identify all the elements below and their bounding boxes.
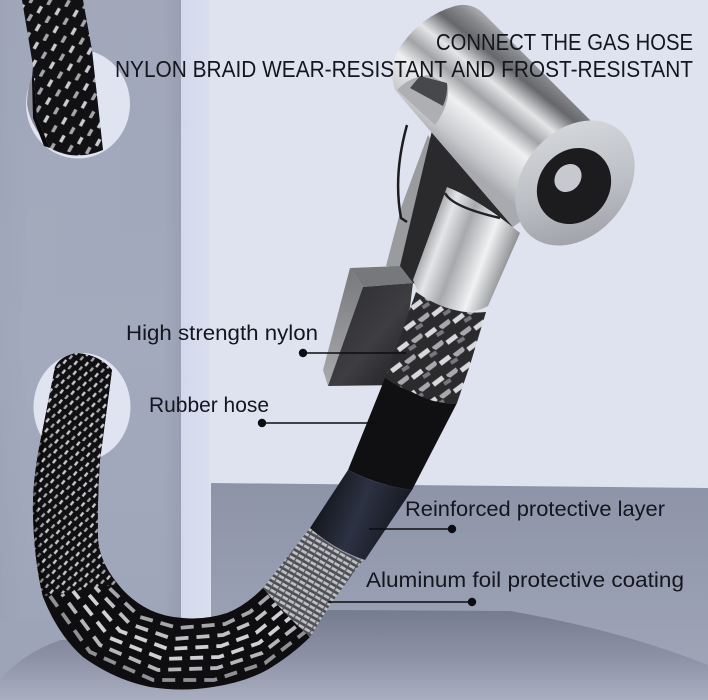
aluminum foil layer <box>263 528 363 637</box>
short braided section near collar <box>385 292 486 403</box>
reinforced protective layer <box>310 470 412 560</box>
callout: high strength nylon <box>126 322 406 357</box>
connector cylinder body <box>392 5 592 227</box>
lower hole in column <box>34 353 130 461</box>
metal clip lever <box>386 122 513 290</box>
nylon braided U-shaped hose <box>32 353 310 690</box>
callout: reinforced protective layer <box>369 498 665 533</box>
clip tab <box>323 266 413 386</box>
callout: rubber hose <box>149 394 379 427</box>
connector notch <box>397 75 448 125</box>
callout: rubber hose: Rubber hose <box>149 394 269 417</box>
top hose passing through hole <box>22 0 130 158</box>
connector inner recess <box>521 133 627 239</box>
connector end face <box>491 97 659 269</box>
title <box>115 29 693 82</box>
connector valve hole <box>549 158 587 198</box>
rubber hose <box>348 378 457 490</box>
callout: high strength nylon: High strength nylon <box>126 322 318 345</box>
metal connector head <box>392 5 659 269</box>
callout: aluminum foil protective coating <box>328 569 684 606</box>
callout: reinforced protective layer: Reinforced protective layer <box>405 498 665 521</box>
callout: aluminum foil protective coating: Aluminum foil protective coating <box>366 569 684 592</box>
swivel collar <box>413 187 520 312</box>
